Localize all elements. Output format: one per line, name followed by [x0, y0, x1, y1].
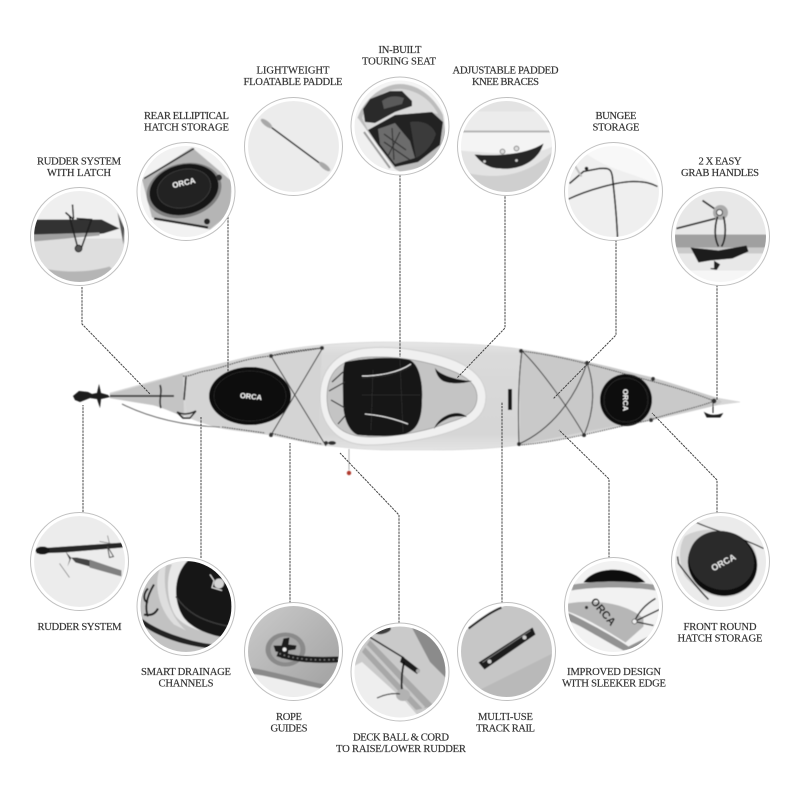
- rear elliptical hatch: [209, 367, 291, 425]
- callout: rudder system: [30, 512, 128, 610]
- callout label: lightweight floatable paddle: LIGHTWEIGHT: [256, 66, 330, 77]
- callout label: lightweight floatable paddle: [244, 66, 342, 88]
- callout label: grab handles: 2 X EASY: [698, 156, 742, 168]
- callout label: deck ball and cord: TO RAISE/LOWER RUDDER: [336, 744, 467, 755]
- callout label: improved design with sleeker edge: IMPROVED DESIGN: [567, 667, 661, 678]
- callout: grab handles: [670, 186, 770, 286]
- seat cover: [343, 358, 422, 436]
- callout label: front round hatch storage: [678, 622, 762, 644]
- callout: rope guides: [244, 602, 344, 702]
- callout label: rope guides: ROPE: [276, 712, 302, 723]
- callout: in-built touring seat: [350, 76, 450, 176]
- callout label: rear elliptical hatch storage: REAR ELLIPTICAL: [144, 111, 229, 122]
- callout label: rudder system: RUDDER SYSTEM: [38, 622, 122, 633]
- callout label: grab handles: GRAB HANDLES: [681, 168, 759, 179]
- callout: rear elliptical hatch storage: ORCA: [171, 176, 197, 190]
- callout label: bungee storage: BUNGEE: [596, 111, 636, 122]
- callout label: rudder system with latch: WITH LATCH: [47, 168, 111, 179]
- callout label: smart drainage channels: SMART DRAINAGE: [141, 667, 231, 678]
- rear elliptical hatch: ORCA: [239, 391, 263, 402]
- callout label: bungee storage: STORAGE: [592, 122, 640, 133]
- knee brace top: [435, 368, 472, 383]
- callout label: smart drainage channels: [141, 667, 231, 689]
- callout label: in-built touring seat: [362, 45, 437, 68]
- rear deck panel: [183, 346, 322, 445]
- callout: multi-use track rail: [456, 602, 556, 702]
- callout: front round hatch storage: [670, 512, 770, 612]
- bow handle: [705, 403, 722, 417]
- callout label: rudder system with latch: RUDDER SYSTEM: [37, 156, 122, 168]
- stern deck shade: [110, 373, 184, 417]
- track rail: [508, 389, 512, 410]
- knee brace bottom: [434, 413, 467, 429]
- seat mesh: [362, 360, 420, 432]
- kayak: [73, 342, 740, 475]
- cockpit opening: [327, 357, 477, 437]
- seat reflective strips: [362, 364, 411, 424]
- callout: smart drainage channels: [136, 556, 236, 656]
- callout: bungee storage: [564, 142, 662, 240]
- callout label: rear elliptical hatch storage: HATCH STORAGE: [144, 122, 229, 133]
- callout label: lightweight floatable paddle: FLOATABLE PADDLE: [244, 77, 342, 88]
- callout label: rudder system with latch: [37, 156, 122, 179]
- kayak hull: [110, 342, 740, 450]
- callout: front round hatch storage: ORCA: [709, 552, 738, 573]
- leader lines: [82, 175, 717, 623]
- callout label: multi-use track rail: MULTI-USE: [478, 712, 533, 723]
- cockpit rim: [320, 347, 486, 445]
- callout label: adjustable padded knee braces: ADJUSTABLE PADDED: [452, 66, 559, 77]
- callout: improved design with sleeker edge: ORCA: [588, 596, 618, 628]
- red deck ball and cord: [347, 449, 351, 475]
- callout label: multi-use track rail: [476, 712, 535, 734]
- callout label: deck ball and cord: [336, 733, 467, 755]
- callout label: adjustable padded knee braces: KNEE BRACES: [472, 77, 539, 88]
- front round hatch: [600, 374, 652, 426]
- callout label: rope guides: GUIDES: [270, 724, 308, 734]
- callout label: front round hatch storage: HATCH STORAGE: [678, 633, 762, 644]
- rudder cord: [122, 404, 220, 427]
- callout: rear elliptical hatch storage: [136, 142, 236, 242]
- rudder assembly: [73, 377, 196, 418]
- callout label: rear elliptical hatch storage: [144, 111, 229, 133]
- callout label: improved design with sleeker edge: [562, 667, 666, 689]
- callout label: front round hatch storage: FRONT ROUND: [684, 622, 757, 633]
- front round hatch: ORCA: [621, 389, 630, 412]
- callout label: bungee storage: [592, 111, 640, 133]
- callout label: smart drainage channels: CHANNELS: [158, 678, 214, 689]
- callout label: deck ball and cord: DECK BALL & CORD: [353, 733, 449, 744]
- callout label: adjustable padded knee braces: [452, 66, 559, 88]
- callout: deck ball and cord: [350, 622, 450, 722]
- callout: lightweight floatable paddle: [244, 98, 342, 196]
- deck lines and bungees: [183, 348, 714, 446]
- callout: improved design with sleeker edge: [564, 556, 664, 656]
- callout: adjustable padded knee braces: [456, 96, 556, 196]
- callout label: improved design with sleeker edge: WITH SLEEKER EDGE: [562, 678, 666, 689]
- callout label: in-built touring seat: TOURING SEAT: [362, 57, 437, 68]
- front deck panel: [520, 350, 722, 445]
- callout label: grab handles: [681, 156, 759, 179]
- callout label: multi-use track rail: TRACK RAIL: [476, 724, 535, 734]
- callout: rudder system with latch: [30, 186, 130, 286]
- callout label: rope guides: [270, 712, 308, 734]
- callout label: in-built touring seat: IN-BUILT: [378, 45, 422, 56]
- deck fittings: [269, 346, 716, 446]
- seat straps: [329, 372, 345, 424]
